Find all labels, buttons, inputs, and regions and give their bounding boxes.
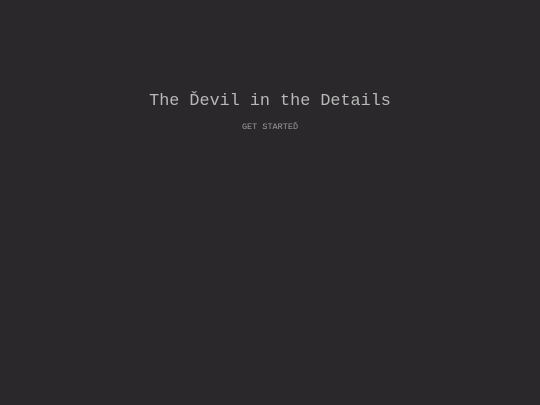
button: get started: GET STARTEĎ — [242, 122, 298, 132]
title: The Ďevil in the Details — [149, 92, 391, 111]
